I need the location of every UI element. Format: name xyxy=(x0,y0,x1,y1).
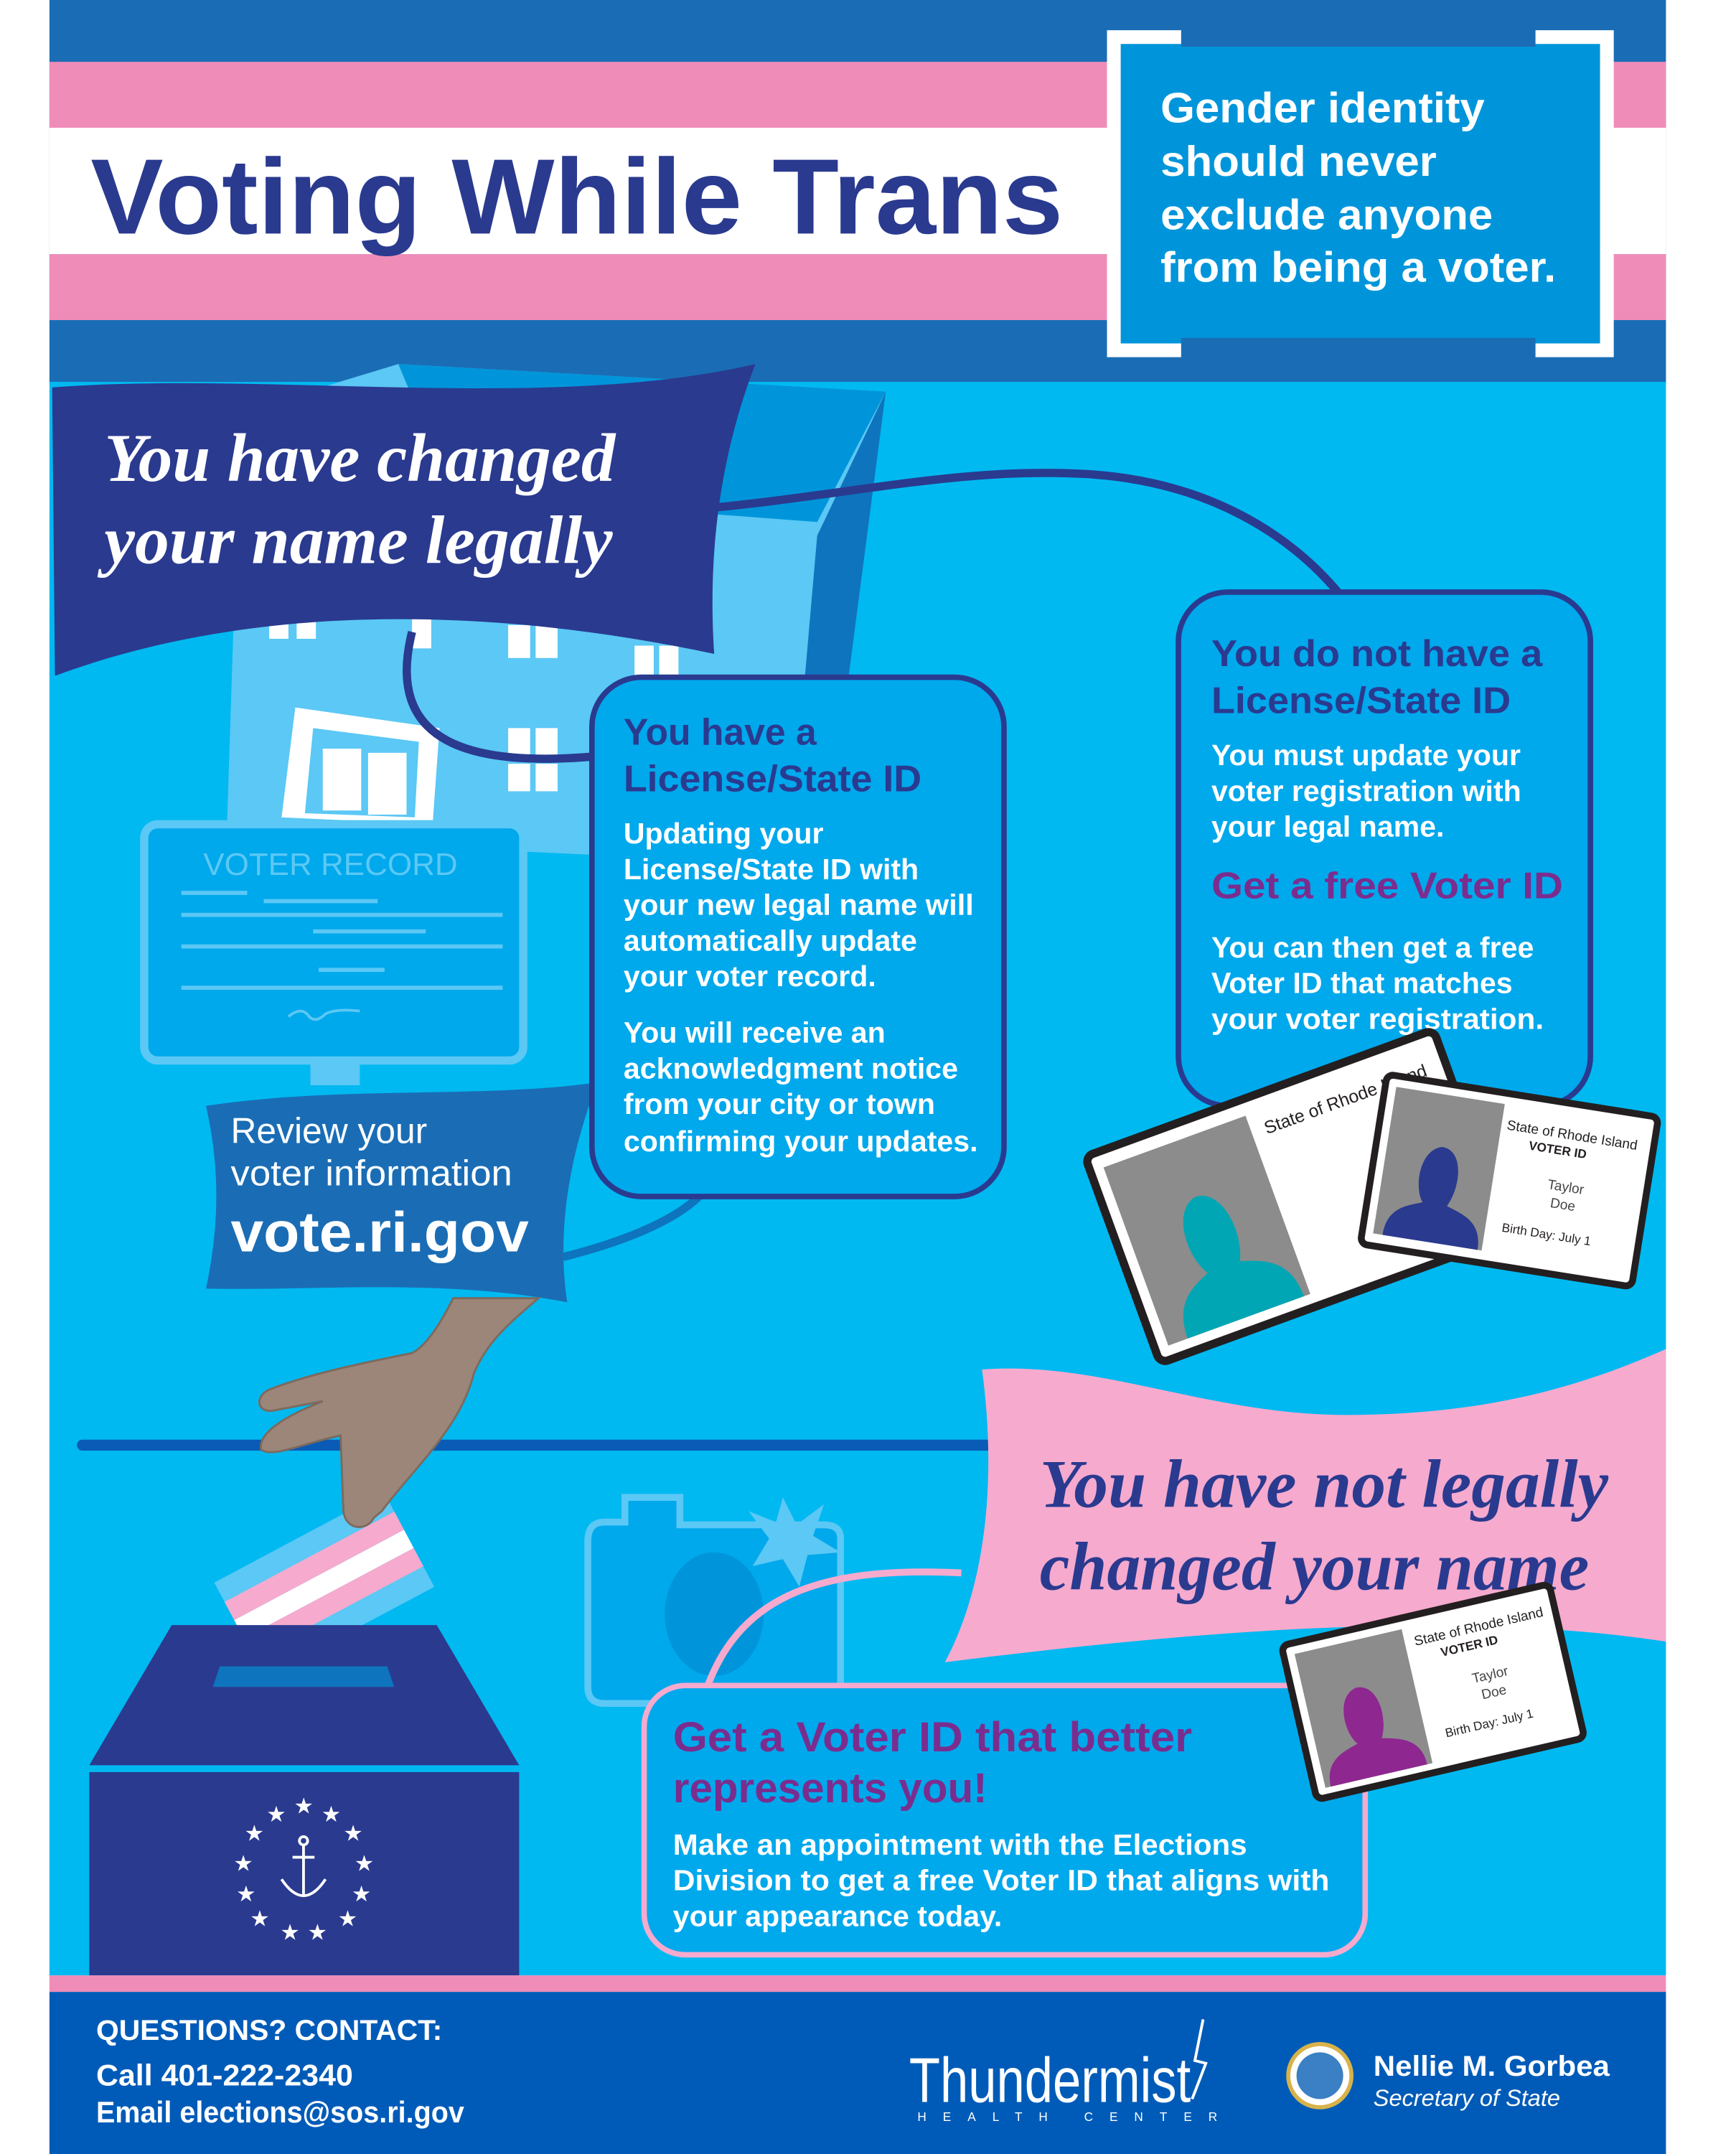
panel: no license: You do not have a xyxy=(1211,632,1543,674)
icon: voter id cards: State of Rhode Island xyxy=(1506,1118,1638,1153)
panel: no license: You must update your xyxy=(1211,739,1521,772)
panel: have license: You have a xyxy=(624,711,817,752)
icon: ballot box: ★ xyxy=(266,1802,286,1827)
panel: get voter id that represents you: Division to get a free Voter ID that aligns with xyxy=(673,1864,1330,1897)
callout: gender identity xyxy=(1107,27,1614,360)
icon: ballot box: ★ xyxy=(355,1852,374,1876)
pink connector xyxy=(708,1572,962,1687)
callout: gender identity: Gender identity xyxy=(1160,83,1485,131)
callout: gender identity: should never xyxy=(1160,137,1437,185)
panel: have license: your new legal name will xyxy=(624,889,974,922)
panel: have license: License/State ID xyxy=(624,757,921,799)
panel: no license: Get a free Voter ID xyxy=(1211,865,1563,907)
icon: voter id cards xyxy=(1085,1030,1658,1363)
icon: voter id card pink: State of Rhode Island xyxy=(1413,1605,1545,1649)
banner: not legally changed: changed your name xyxy=(1040,1528,1589,1604)
connector curves xyxy=(407,473,1339,1257)
logo: thundermist xyxy=(909,2019,1234,2124)
footer xyxy=(50,1975,1666,2154)
icon: voter record monitor: VOTER RECORD xyxy=(203,847,458,882)
banner: you have changed your name legally: You have changed xyxy=(104,420,617,496)
panel: no license: License/State ID xyxy=(1211,679,1511,721)
panel: no license: your voter registration. xyxy=(1211,1003,1544,1036)
banner: not legally changed xyxy=(945,1349,1666,1662)
icon: ballot box xyxy=(89,1625,519,1975)
header band xyxy=(50,0,1666,385)
panel: have license: automatically update xyxy=(624,924,917,957)
banner: review voter info xyxy=(206,1082,597,1302)
footer contact text: Call 401-222-2340 xyxy=(96,2058,353,2092)
main background xyxy=(50,382,1666,1975)
icon: voter id cards: VOTER ID xyxy=(1528,1138,1587,1161)
icon: ballot box: ★ xyxy=(338,1906,357,1931)
icon: ballot box: ★ xyxy=(352,1882,371,1906)
icon: voter id cards: Taylor xyxy=(1547,1177,1585,1198)
panel: have license: your voter record. xyxy=(624,960,876,993)
banner: review voter info: voter information xyxy=(231,1153,512,1194)
panel: get voter id that represents you: represents you! xyxy=(673,1765,987,1812)
banner: review voter info: Review your xyxy=(231,1110,427,1151)
icon: voter id card pink: Doe xyxy=(1480,1682,1508,1703)
panel: no license: You can then get a free xyxy=(1211,931,1534,964)
logo: secretary of state xyxy=(1288,2044,1610,2111)
icon: voter record monitor xyxy=(144,824,523,1085)
icon: ballot box: ★ xyxy=(250,1906,270,1931)
panel: get voter id that represents you: Get a Voter ID that better xyxy=(673,1714,1192,1761)
panel: have license: License/State ID with xyxy=(624,853,919,886)
icon: voter id card pink: VOTER ID xyxy=(1439,1632,1499,1659)
icon: voter id cards: State of Rhode Island xyxy=(1262,1061,1430,1138)
icon: ballot box: ★ xyxy=(294,1794,314,1818)
logo: thundermist: Thundermist xyxy=(909,2044,1191,2115)
banner: not legally changed: You have not legally xyxy=(1040,1446,1609,1522)
icon: ballot box: ★ xyxy=(280,1920,300,1944)
banner: you have changed your name legally xyxy=(52,364,756,676)
panel: get voter id that represents you: Make an appointment with the Elections xyxy=(673,1828,1247,1861)
panel: have license: confirming your updates. xyxy=(624,1125,978,1158)
panel: no license: your legal name. xyxy=(1211,810,1444,843)
icon: ballot box: ★ xyxy=(233,1852,253,1876)
callout: gender identity: exclude anyone xyxy=(1160,191,1493,239)
icon: voter id cards: Doe xyxy=(1549,1196,1577,1214)
footer contact text: QUESTIONS? CONTACT: xyxy=(96,2014,442,2046)
panel: get voter id that represents you: your appearance today. xyxy=(673,1899,1002,1932)
panel: have license: Updating your xyxy=(624,817,824,850)
icon: ballot box: ★ xyxy=(308,1920,327,1944)
icon: ballot box: ★ xyxy=(245,1822,264,1846)
icon: ballot box: ★ xyxy=(343,1822,363,1846)
icon: hand with ballot xyxy=(215,1298,538,1677)
logo: secretary of state: Nellie M. Gorbea xyxy=(1374,2050,1610,2082)
callout: gender identity: from being a voter. xyxy=(1160,243,1556,291)
icon: voter id card pink: Birth Day: July 1 xyxy=(1444,1706,1534,1740)
icon: ballot box: ★ xyxy=(236,1882,256,1906)
panel: no license: Voter ID that matches xyxy=(1211,967,1513,1000)
panel: no license: voter registration with xyxy=(1211,774,1521,807)
panel: have license: You will receive an xyxy=(624,1016,886,1049)
icon: ballot box: ★ xyxy=(322,1802,341,1827)
icon: camera xyxy=(588,1497,840,1703)
footer contact text xyxy=(96,2014,464,2129)
title: Voting While Trans xyxy=(90,136,1063,256)
icon: voter id card pink: Taylor xyxy=(1470,1664,1510,1687)
footer contact text: Email elections@sos.ri.gov xyxy=(96,2095,464,2129)
banner: review voter info: vote.ri.gov xyxy=(231,1201,529,1264)
panel: have license xyxy=(592,678,1004,1197)
panel: have license: acknowledgment notice xyxy=(624,1052,958,1085)
panel: get voter id that represents you xyxy=(644,1685,1365,1954)
icon: voter id card pink xyxy=(1282,1584,1585,1799)
panel: no license xyxy=(1178,592,1590,1106)
building xyxy=(227,364,886,866)
logo: secretary of state: Secretary of State xyxy=(1374,2085,1560,2111)
icon: voter id cards: Birth Day: July 1 xyxy=(1501,1220,1592,1248)
logo: thundermist: HEALTH CENTER xyxy=(917,2109,1234,2124)
panel: have license: from your city or town xyxy=(624,1087,935,1120)
banner: you have changed your name legally: your name legally xyxy=(97,502,613,579)
shelf line xyxy=(83,1442,1003,1448)
